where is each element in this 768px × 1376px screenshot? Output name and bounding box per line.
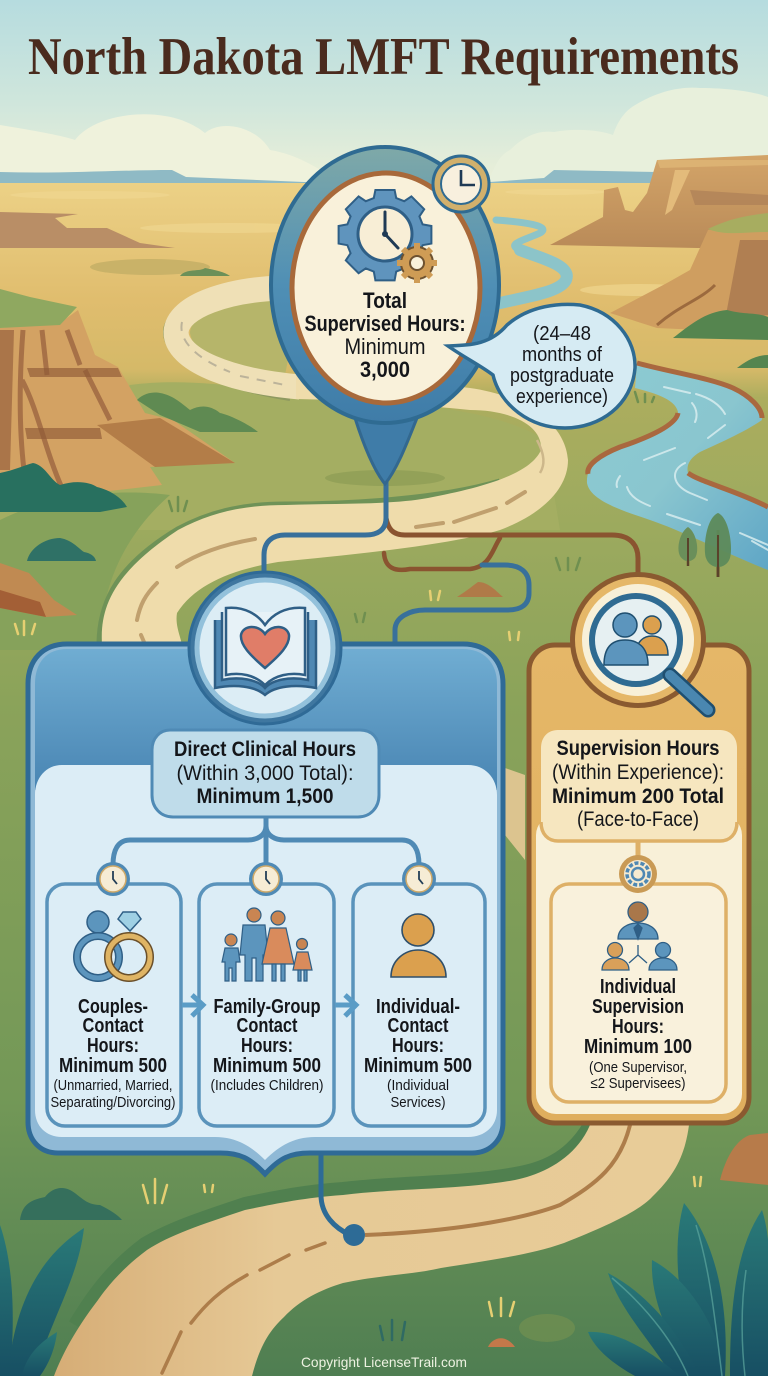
background: road between panels: [505, 768, 525, 860]
background: mid bush: [137, 393, 258, 432]
background: green below road: [0, 493, 170, 650]
background: left mesa: [0, 289, 235, 492]
icon: supervisor with two supervisees: [602, 902, 677, 970]
background: road loop: [165, 283, 300, 399]
sub-card text: (Includes Children): [210, 1077, 324, 1094]
icon: clock: [96, 862, 130, 896]
panel light body: [536, 815, 742, 1114]
background: sky: [0, 0, 768, 185]
panel: direct clinical hours: [28, 572, 503, 1174]
pin text: Minimum: [344, 334, 426, 359]
icon: gear with clock: [339, 190, 437, 283]
icon: gear badge: [619, 855, 657, 893]
background: upper river: [496, 220, 567, 303]
sub-card text: Hours:: [612, 1016, 664, 1038]
icon: open book with heart: [189, 572, 341, 724]
sub-card text: (Unmarried, Married,: [54, 1077, 172, 1094]
background: trees: [678, 513, 731, 577]
background: main river: [587, 363, 768, 570]
sub-card text: Contact: [388, 1015, 449, 1037]
sub-card: individual contact hours: [353, 862, 485, 1126]
background: foliage left: [0, 1225, 84, 1376]
panel outer body: [28, 644, 503, 1174]
background: far left mesa: [0, 212, 175, 248]
sub-card text: ≤2 Supervisees): [590, 1075, 686, 1092]
icon: person: [391, 914, 446, 977]
sub-card text: [210, 996, 324, 1094]
sub-card: individual supervision hours: [551, 855, 726, 1102]
sub-card: couples contact hours: [47, 862, 181, 1126]
panel heading plate: Minimum 1,500: [196, 785, 334, 808]
background: right cloud: [490, 88, 768, 182]
sub-card text: (One Supervisor,: [589, 1059, 687, 1076]
callout: months of postgraduate experience: months of: [522, 344, 602, 366]
arrow: family to individual: [335, 995, 356, 1016]
sub-card text: [50, 996, 176, 1111]
background: right far mesa: [550, 155, 768, 250]
sub-card text: Individual-: [376, 996, 460, 1018]
sub-card text: Family-Group: [214, 996, 320, 1018]
icon: magnifier with people: [570, 572, 708, 710]
pin pointer: [355, 418, 417, 484]
connector lines from pin to panels: [264, 480, 638, 1235]
panel heading plate: Direct Clinical Hours: [174, 738, 356, 761]
panel: supervision hours: [529, 572, 749, 1123]
pin: total supervised hours: [271, 147, 499, 484]
background: foliage right: [588, 1203, 768, 1376]
icon: clock: [402, 862, 436, 896]
background: right bushes: [673, 310, 768, 368]
panel heading plate: (Within 3,000 Total):: [176, 762, 354, 785]
callout: months of postgraduate experience: experience): [516, 386, 608, 408]
panel heading plate: (Face-to-Face): [577, 808, 699, 831]
pin text: Total: [363, 288, 407, 313]
sub-card text: Contact: [236, 1015, 298, 1037]
sub-card text: [584, 976, 692, 1092]
sub-card text: Contact: [82, 1015, 144, 1037]
sub-card text: Couples-: [78, 996, 148, 1018]
connector end dot: [343, 1224, 365, 1246]
icon: clock badge: [433, 156, 489, 212]
background: lower road: [54, 1125, 689, 1376]
background: olive patch: [90, 259, 210, 275]
icon: clock: [249, 862, 283, 896]
pin text: Supervised Hours:: [304, 311, 466, 336]
sub-card text: Individual: [600, 976, 676, 998]
sub-card text: Separating/Divorcing): [50, 1094, 176, 1111]
panel light body: [35, 765, 497, 1160]
sub-card text: Minimum 500: [213, 1055, 321, 1077]
panel outer body: [529, 645, 749, 1123]
icon: family: [222, 908, 312, 981]
background: distant hills: [0, 170, 657, 185]
copyright: Copyright LicenseTrail.com: [301, 1354, 467, 1370]
background: lower road shoulder: [75, 1125, 590, 1325]
background: green meadow under pin: [0, 382, 560, 530]
callout: months of postgraduate experience: [448, 304, 635, 428]
connector stem: [636, 841, 640, 858]
panel heading plate: Supervision Hours: [556, 737, 720, 760]
background: small bushes and rocks: [0, 268, 768, 1347]
sub-card text: Supervision: [592, 996, 684, 1018]
background: left teal bush: [0, 463, 127, 512]
panel heading plate: (Within Experience):: [552, 761, 724, 784]
sub-card text: Minimum 500: [364, 1055, 472, 1077]
panel blue header: [35, 649, 497, 790]
background: grass tufts: [15, 392, 701, 1340]
sub-card text: Hours:: [87, 1035, 139, 1057]
panel heading plate: [541, 730, 737, 841]
callout: months of postgraduate experience: (24–48: [533, 323, 591, 345]
pin cream face: [292, 173, 480, 403]
arrow: couples to family: [182, 995, 203, 1016]
sub-card text: Minimum 100: [584, 1036, 692, 1058]
sub-card text: (Individual: [387, 1077, 449, 1094]
sub-card text: Hours:: [241, 1035, 293, 1057]
sub-card: family-group contact hours: [199, 862, 334, 1126]
icon: rings: [77, 911, 150, 978]
sub-card text: Minimum 500: [59, 1055, 167, 1077]
pin text: 3,000: [360, 357, 410, 382]
background: plains bands: [10, 189, 700, 296]
panel heading plate: Minimum 200 Total: [552, 785, 724, 808]
connector tree to sub-cards: [113, 818, 419, 865]
panel heading plate: [152, 730, 379, 817]
background: road middle: [100, 375, 568, 645]
pin ring: [271, 147, 499, 423]
background: left cloud: [0, 114, 340, 182]
pin text: [304, 288, 466, 382]
background: right near mesa: [610, 213, 768, 330]
callout: months of postgraduate experience: postgraduate: [510, 365, 614, 387]
sub-card text: [364, 996, 472, 1111]
sub-card text: Hours:: [392, 1035, 444, 1057]
sub-card text: Services): [390, 1094, 446, 1111]
